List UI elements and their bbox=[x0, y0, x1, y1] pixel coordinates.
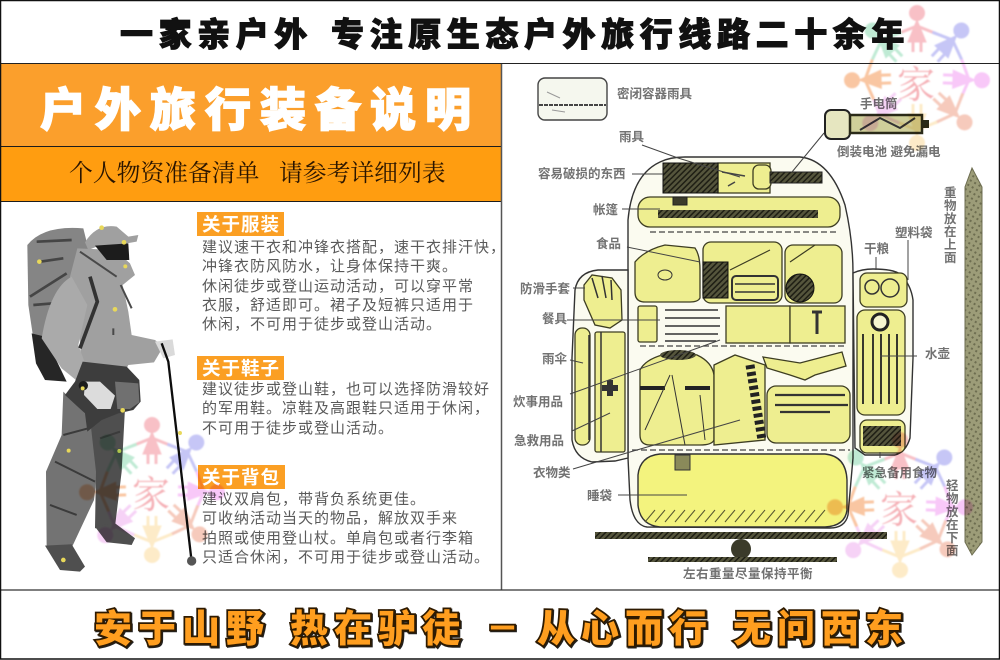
text: backpack advice: 拍照或使用登山杖。单肩包或者行李箱 bbox=[202, 530, 474, 547]
compartment: dry food, water bottle, emergency food bbox=[857, 273, 907, 453]
labels: gear names: 容易破损的东西 bbox=[538, 166, 626, 181]
label: light items at bottom: 在 bbox=[946, 517, 959, 532]
watermark: left family logo: 家 bbox=[132, 475, 170, 517]
text: shoes advice: 的军用鞋。凉鞋及高跟鞋只适用于休闲， bbox=[202, 400, 490, 417]
labels: gear names bbox=[513, 86, 950, 581]
balance board and fulcrum bbox=[595, 532, 887, 562]
label: about shoes: 关于鞋子 bbox=[202, 358, 280, 379]
labels: gear names: 雨伞 bbox=[542, 351, 568, 366]
title banner: 一家亲户外 bbox=[120, 16, 313, 53]
heading: outdoor travel gear guide: 户外旅行装备说明 bbox=[40, 84, 480, 136]
icon: sealed container bbox=[538, 78, 607, 120]
labels: gear names: 防滑手套 bbox=[520, 281, 571, 296]
text: clothing advice: 衣服，舒适即可。裙子及短裤只适用于 bbox=[202, 297, 474, 314]
label: light items at bottom: 轻 bbox=[946, 478, 959, 493]
watermark: right family logo: 家 bbox=[880, 490, 918, 532]
labels: gear names: 紧急备用食物 bbox=[862, 465, 938, 480]
labels: gear names: 干粮 bbox=[864, 241, 890, 256]
watermark: top right family logo bbox=[844, 6, 990, 150]
text: clothing advice: 休闲徒步或登山运动活动，可以穿平常 bbox=[202, 278, 474, 295]
compartment: glove and pocket items bbox=[575, 275, 625, 452]
section: about shoes bbox=[197, 356, 490, 437]
right side pocket bbox=[853, 269, 913, 455]
footer slogan: 热在驴徒 bbox=[290, 609, 466, 651]
labels: gear names: 倒装电池 避免漏电 bbox=[837, 144, 941, 159]
labels: gear names: 手电筒 bbox=[860, 96, 898, 111]
text: shoes advice: 不可用于徒步或登山活动。 bbox=[202, 420, 394, 437]
text: backpack advice: 可收纳活动当天的物品，解放双手来 bbox=[202, 510, 458, 527]
watermark: right family logo bbox=[827, 432, 973, 578]
text: backpack advice: 建议双肩包，带背负系统更佳。 bbox=[202, 491, 426, 508]
text: clothing advice: 建议速干衣和冲锋衣搭配，速干衣排汗快， bbox=[202, 239, 506, 256]
leader lines bbox=[567, 133, 917, 495]
label: about backpacks: 关于背包 bbox=[202, 467, 280, 488]
footer slogan: 一 bbox=[490, 615, 521, 643]
label: heavy items on top: 重 bbox=[944, 185, 957, 200]
labels: gear names: 密闭容器雨具 bbox=[617, 86, 693, 101]
left side pocket bbox=[572, 270, 628, 462]
icon: flashlight in pack bbox=[753, 165, 822, 189]
compartment: food bbox=[635, 242, 842, 303]
label: light items at bottom: 下 bbox=[946, 531, 959, 545]
labels: gear names: 炊事用品 bbox=[513, 394, 563, 409]
labels: gear names: 左右重量尽量保持平衡 bbox=[683, 566, 813, 581]
footer slogan: 安于山野 bbox=[94, 609, 270, 651]
panel: orange header bbox=[0, 64, 501, 202]
label: light items at bottom: 面 bbox=[946, 544, 959, 558]
label: about clothing: 关于服装 bbox=[202, 214, 280, 235]
diagram: backpack packing illustration bbox=[513, 78, 982, 581]
labels: gear names: 急救用品 bbox=[514, 433, 564, 448]
labels: gear names: 帐篷 bbox=[593, 202, 619, 217]
section: about clothing bbox=[197, 212, 506, 333]
footer slogan: 从心而行 bbox=[537, 609, 713, 651]
label: light items at bottom: 物 bbox=[946, 491, 959, 506]
compartment: tent bbox=[638, 197, 840, 227]
labels: gear names: 水壶 bbox=[925, 346, 950, 361]
compartment: tableware bbox=[638, 306, 845, 343]
watermark: left family logo bbox=[79, 418, 225, 562]
title banner: 专注原生态户外旅行线路二十余年 bbox=[331, 16, 910, 53]
labels: gear names: 睡袋 bbox=[587, 488, 613, 503]
icon: flashlight bbox=[825, 110, 929, 139]
footer slogan: 无问西东 bbox=[733, 609, 909, 651]
arrow: weight direction bbox=[965, 168, 982, 555]
labels: gear names: 衣物类 bbox=[533, 465, 571, 480]
subheading: personal supplies list: 请参考详细列表 bbox=[279, 160, 446, 187]
text: clothing advice: 休闲，不可用于徒步或登山活动。 bbox=[202, 316, 442, 333]
photo: hiker with backpack and trekking pole bbox=[27, 225, 196, 572]
labels: gear names: 食品 bbox=[596, 236, 621, 251]
label: heavy items on top: 上 bbox=[944, 238, 957, 252]
text: backpack advice: 只适合休闲，不可用于徒步或登山活动。 bbox=[202, 549, 490, 566]
subheading: personal supplies list: 个人物资准备清单 bbox=[69, 160, 259, 187]
section: about backpacks bbox=[198, 465, 490, 566]
label: heavy items on top: 在 bbox=[944, 224, 957, 239]
labels: gear names: 雨具 bbox=[619, 130, 645, 144]
labels: gear names: 塑料袋 bbox=[895, 225, 933, 240]
backpack outline bbox=[628, 157, 853, 528]
label: heavy items on top: 放 bbox=[944, 211, 957, 226]
labels: gear names: 餐具 bbox=[542, 311, 568, 326]
compartment: sleeping bag bbox=[638, 454, 847, 527]
label: heavy items on top: 物 bbox=[944, 198, 957, 213]
watermark: top right family logo: 家 bbox=[897, 65, 935, 107]
compartment: fragile items and rain gear bbox=[663, 163, 770, 193]
label: light items at bottom: 放 bbox=[946, 504, 959, 519]
compartment: clothing bbox=[640, 350, 850, 445]
text: clothing advice: 冲锋衣防风防水，让身体保持干爽。 bbox=[202, 258, 458, 275]
label: heavy items on top: 面 bbox=[944, 251, 957, 265]
text: shoes advice: 建议徒步或登山鞋，也可以选择防滑较好 bbox=[202, 380, 490, 398]
